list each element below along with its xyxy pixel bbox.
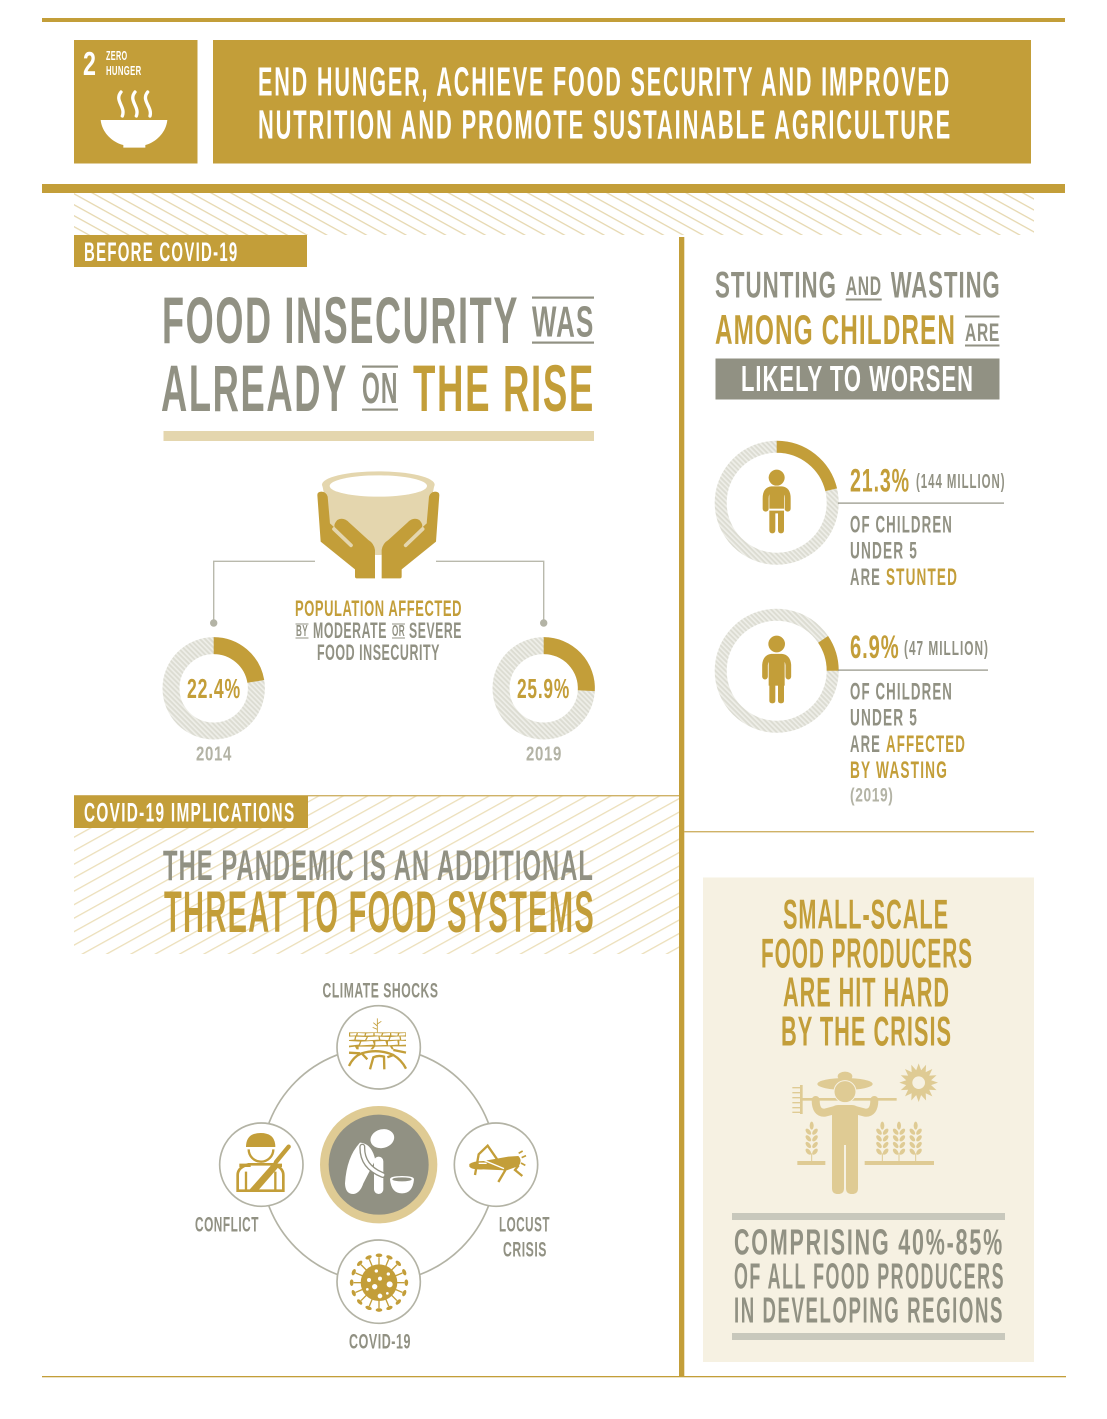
headline: food insecurity on the rise: ON: [362, 364, 398, 413]
SDG tile: zero hunger: ZERO: [106, 48, 128, 63]
connector: left: [210, 561, 315, 627]
SDG tile: zero hunger: HUNGER: [106, 63, 142, 78]
diagram: four threats cycle: LOCUST: [499, 1214, 550, 1236]
stat: wasting 6.9%: (47 MILLION): [904, 638, 989, 660]
title banner: [213, 40, 1031, 164]
node: covid-19 virus: [337, 1240, 420, 1323]
heading: likely to worsen: [715, 264, 1001, 400]
diagram: four threats cycle: COVID-19: [349, 1330, 411, 1354]
heading: hit hard: ARE HIT HARD: [783, 968, 950, 1016]
heading: hit hard: BY THE CRISIS: [781, 1008, 952, 1054]
panel: before covid-19: [74, 235, 595, 766]
panel: covid-19 implications: [74, 795, 679, 1354]
donut: 2014 22.4%: 22.4%: [187, 673, 241, 704]
stat: stunted 21.3%: (144 MILLION): [916, 471, 1006, 493]
donut: 2019 25.9%: 2019: [526, 744, 562, 766]
section tag: covid-19 implications: COVID-19 IMPLICATIONS: [84, 798, 296, 828]
stat: wasting 6.9%: ARE: [850, 731, 881, 758]
donut: 2019 25.9%: [501, 646, 586, 766]
heading: likely to worsen: AND: [846, 271, 882, 301]
center: hungry person with bowl: [320, 1106, 437, 1223]
section tag: before covid-19: BEFORE COVID-19: [84, 237, 238, 267]
stat: stunted 21.3%: ARE: [850, 564, 881, 591]
headline: pandemic threat: THE PANDEMIC IS AN ADDITIONAL: [163, 842, 594, 890]
column divider: [679, 237, 684, 1376]
connector: right: [436, 561, 547, 627]
header band: [42, 18, 1065, 193]
section tag: covid-19 implications: [74, 796, 308, 828]
panel: small-scale food producers: [703, 878, 1034, 1362]
headline: pandemic threat: [163, 842, 595, 945]
headline: food insecurity on the rise: THE RISE: [413, 351, 595, 425]
stat: wasting 6.9%: OF CHILDREN: [850, 678, 953, 706]
stat: wasting 6.9%: (2019): [850, 786, 894, 806]
stat: stunted 21.3%: [721, 447, 1006, 591]
icon: hands holding bowl: [317, 471, 439, 578]
stat: wasting 6.9%: AFFECTED: [886, 731, 966, 758]
headline: food insecurity on the rise: WAS: [532, 298, 594, 346]
stat: stunted 21.3%: UNDER 5: [850, 538, 918, 564]
heading: hit hard: [761, 890, 973, 1054]
caption: population affected: MODERATE: [313, 618, 387, 643]
donut: 2019 25.9%: 25.9%: [517, 673, 570, 704]
icon: steaming bowl: [101, 92, 167, 148]
icon: stunted child: [766, 470, 788, 533]
heading: likely to worsen: STUNTING: [715, 264, 837, 306]
SDG tile: zero hunger: [74, 40, 198, 164]
headline: food insecurity on the rise: FOOD INSECURITY: [162, 283, 519, 357]
panel: stunting and wasting: [715, 264, 1006, 806]
diagram: four threats cycle: CLIMATE SHOCKS: [322, 980, 438, 1002]
stat: stunted 21.3%: OF CHILDREN: [850, 512, 953, 538]
icon: farmer with rake: [792, 1063, 938, 1194]
donut: 2014 22.4%: 2014: [196, 744, 232, 766]
headline: pandemic threat: THREAT TO FOOD SYSTEMS: [164, 880, 595, 945]
caption: population affected: FOOD INSECURITY: [317, 640, 440, 665]
diagram: four threats cycle: CONFLICT: [195, 1214, 259, 1236]
heading: hit hard: SMALL-SCALE: [783, 890, 949, 938]
stat: stunted 21.3%: 21.3%: [850, 462, 910, 498]
headline: food insecurity on the rise: ALREADY: [161, 351, 348, 425]
headline: food insecurity on the rise: [161, 283, 595, 425]
node: conflict soldier: [220, 1123, 303, 1206]
heading: likely to worsen: ARE: [965, 319, 1000, 347]
SDG tile: zero hunger: 2: [83, 45, 97, 82]
diagram: four threats cycle: CRISIS: [503, 1238, 547, 1262]
caption: population affected: POPULATION AFFECTED: [295, 596, 462, 621]
heading: likely to worsen: WASTING: [891, 264, 1001, 306]
caption: population affected: SEVERE: [409, 618, 462, 643]
stat: wasting 6.9%: UNDER 5: [850, 704, 918, 732]
caption: population affected: BY: [296, 623, 308, 640]
caption: population affected: OR: [392, 623, 405, 640]
node: locust crisis: [454, 1123, 538, 1206]
stat: wasting 6.9%: BY WASTING: [850, 757, 948, 784]
node: climate shocks: [337, 1006, 420, 1089]
stat: stunted 21.3%: STUNTED: [886, 564, 958, 591]
donut: 2014 22.4%: [171, 646, 256, 766]
callout: 40%-85% of producers: [732, 1213, 1005, 1340]
icon: wasted child: [765, 636, 788, 703]
stat: wasting 6.9%: [721, 615, 989, 806]
diagram: four threats cycle: [195, 980, 550, 1354]
caption: population affected: [295, 596, 462, 665]
stat: wasting 6.9%: 6.9%: [850, 629, 900, 665]
